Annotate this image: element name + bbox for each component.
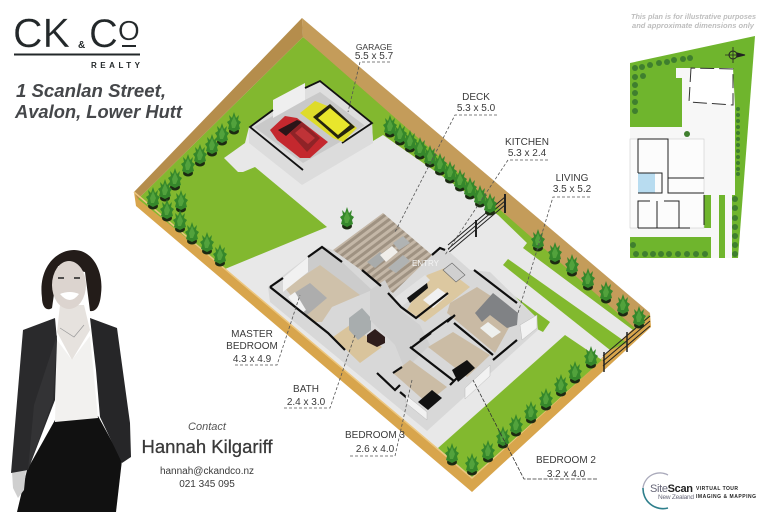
- label: deck: [395, 92, 497, 232]
- interior walls: [270, 247, 517, 413]
- label: bedroom 2: BEDROOM 2: [536, 455, 596, 466]
- smile: [60, 292, 79, 300]
- garage outline: [689, 68, 733, 105]
- label: deck: DECK: [462, 92, 490, 103]
- label: master bedroom: 4.3 x 4.9: [233, 354, 272, 365]
- front wood top edge: [134, 192, 603, 478]
- face: [52, 261, 86, 309]
- logo: CK & Co Realty: &: [78, 40, 85, 51]
- gate: back: [448, 194, 505, 253]
- label: kitchen: [445, 137, 549, 255]
- ground: [134, 18, 650, 478]
- label: bedroom 3: [345, 380, 412, 456]
- address: 1 Scanlan Street,: [16, 81, 166, 101]
- hand: [12, 470, 26, 498]
- bath highlight: [638, 173, 655, 193]
- eyes: [58, 277, 80, 279]
- bedroom 3 bed: [418, 390, 442, 410]
- master floor: [285, 265, 360, 322]
- logo: CK & Co Realty: REALTY: [91, 61, 141, 70]
- site paved area: [630, 68, 735, 258]
- label: bedroom 3: 2.6 x 4.0: [356, 444, 395, 455]
- label: bedroom 2: [473, 380, 597, 480]
- label: master bedroom: [226, 295, 300, 365]
- garage inner back wall: [305, 81, 372, 128]
- blazer left: [11, 318, 57, 473]
- bedroom 2 floor: [428, 332, 490, 377]
- pillows: [288, 292, 306, 313]
- contact: hannah@ckandco.nz: [160, 466, 254, 477]
- north arrow: [725, 47, 745, 63]
- pants: [17, 416, 122, 512]
- sliding door: [283, 257, 308, 292]
- portrait: [11, 250, 131, 512]
- back fence face: [134, 18, 303, 199]
- master bed: [288, 283, 327, 315]
- house body: [268, 213, 538, 431]
- label: garage: [348, 42, 394, 112]
- SiteScan logo: [643, 473, 756, 509]
- label: master bedroom: BEDROOM: [226, 341, 278, 352]
- site walls: [638, 139, 704, 228]
- bathroom floor: [333, 325, 382, 363]
- kitchen dining floor: [407, 268, 470, 322]
- fence exterior: [134, 192, 651, 492]
- contact: [142, 421, 274, 490]
- bath walls: [370, 280, 430, 370]
- living floor: [447, 287, 517, 353]
- label: garage: 5.5 x 5.7: [355, 51, 394, 62]
- kitchen black counter: [407, 283, 428, 303]
- logo: CK & Co Realty: [13, 10, 141, 70]
- SiteScan logo: IMAGING & MAPPING: [696, 494, 756, 500]
- mini site plan: [630, 36, 755, 258]
- logo: CK & Co Realty: CK: [13, 10, 70, 56]
- necklace: [60, 325, 84, 337]
- bedroom 3 floor: [393, 360, 447, 403]
- label: bedroom 3: BEDROOM 3: [345, 430, 405, 441]
- label: bath: 2.4 x 3.0: [287, 397, 326, 408]
- label: master bedroom: MASTER: [231, 329, 273, 340]
- vanity: [367, 329, 385, 347]
- garage floor: [254, 88, 368, 163]
- logo: CK & Co Realty: C: [89, 12, 118, 56]
- garage white wall: [273, 83, 305, 118]
- disclaimer: This plan is for illustrative purposes: [631, 12, 756, 21]
- label: deck: 5.3 x 5.0: [457, 103, 496, 114]
- label: kitchen: KITCHEN: [505, 137, 549, 148]
- house: [268, 213, 538, 431]
- contact: Hannah Kilgariff: [142, 437, 274, 457]
- island: [423, 288, 448, 308]
- SiteScan logo: New Zealand: [658, 494, 694, 501]
- label: living: LIVING: [556, 173, 589, 184]
- side strip: [503, 259, 627, 350]
- hair: [41, 250, 101, 311]
- label: living: [518, 173, 592, 313]
- garage: [249, 81, 373, 185]
- site trees: [630, 55, 740, 257]
- property 3D plan: [134, 18, 651, 492]
- address: Avalon, Lower Hutt: [14, 102, 183, 122]
- blazer left panel: [28, 335, 57, 470]
- disclaimer: [631, 12, 756, 30]
- bedroom doors white: [406, 315, 537, 420]
- site strips: [704, 195, 725, 258]
- dining table: [443, 263, 465, 282]
- deck furniture: [367, 236, 410, 273]
- kitchen counter: [392, 275, 430, 307]
- address: [14, 81, 183, 122]
- label: living: 3.5 x 5.2: [553, 184, 592, 195]
- front lawn: [438, 335, 602, 477]
- label: garage: GARAGE: [356, 42, 393, 52]
- disclaimer: and approximate dimensions only: [632, 21, 755, 30]
- back lawn: [138, 37, 650, 330]
- blouse: [55, 336, 98, 422]
- SiteScan logo: VIRTUAL TOUR: [696, 486, 738, 492]
- garage black walls: [250, 81, 372, 170]
- contact: 021 345 095: [179, 479, 235, 490]
- site house: [630, 139, 704, 228]
- label: bath: BATH: [293, 384, 319, 395]
- red car: [270, 116, 328, 158]
- living strip: [488, 277, 550, 332]
- logo: CK & Co Realty: O: [118, 15, 140, 46]
- blazer right: [90, 318, 131, 463]
- yellow car: [300, 101, 357, 142]
- label: bath: [284, 335, 355, 408]
- bedroom 2 bed: [452, 360, 475, 382]
- right fence face: [302, 18, 650, 329]
- bushes: [146, 112, 646, 476]
- shower: [349, 308, 371, 340]
- neck: [57, 305, 90, 360]
- SiteScan logo: SiteScan: [650, 483, 693, 495]
- contact: Contact: [188, 421, 227, 433]
- entry label: ENTRY: [412, 259, 440, 268]
- label: bedroom 2: 3.2 x 4.0: [547, 469, 586, 480]
- coffee table: [480, 322, 501, 338]
- deck: [333, 213, 432, 293]
- master inner walls: [283, 248, 372, 296]
- garage outer walls: [249, 81, 373, 185]
- label: kitchen: 5.3 x 2.4: [508, 148, 547, 159]
- gate: front: [603, 316, 650, 372]
- couch: [475, 293, 518, 328]
- site lawn: [630, 36, 755, 258]
